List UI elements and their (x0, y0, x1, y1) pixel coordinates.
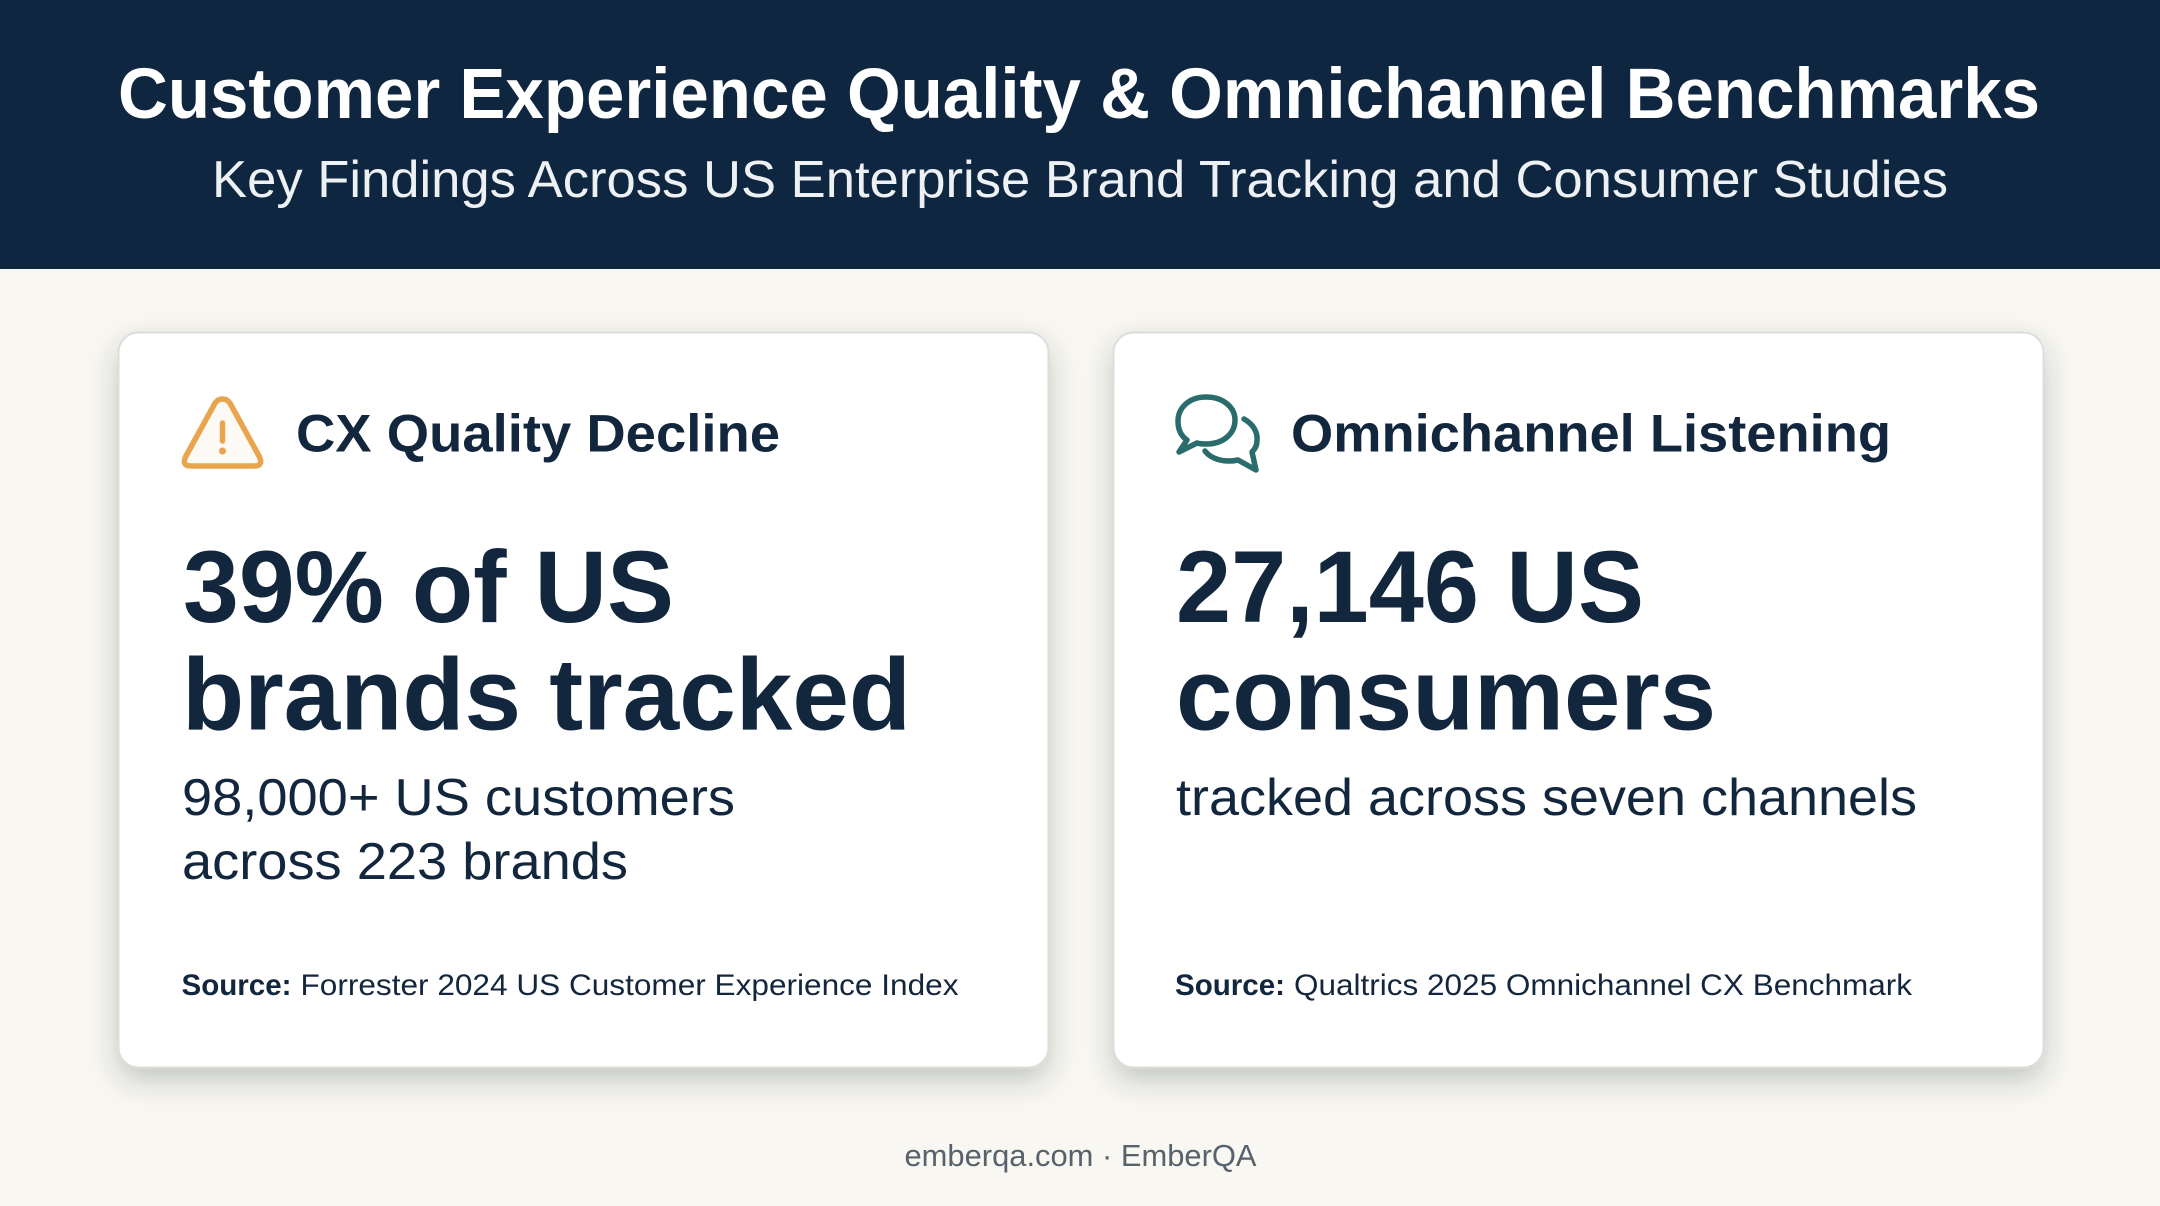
icon: chat bubbles (1178, 397, 1257, 470)
panel heading: CX Quality Decline (296, 404, 780, 464)
headline stat: 39% of US (183, 530, 674, 644)
headline stat: consumers (1176, 638, 1716, 752)
headline stat: 27,146 US (1176, 530, 1644, 644)
header banner (0, 0, 2160, 269)
subtitle: Key Findings Across US Enterprise Brand Tracking and Consumer Studies (212, 151, 1948, 209)
headline stat: brands tracked (182, 638, 911, 752)
stat detail: across 223 brands (182, 833, 628, 891)
icon: warning triangle (184, 399, 261, 466)
source note: Source: (1175, 969, 1285, 1002)
stat detail: tracked across seven channels (1176, 769, 1917, 827)
source note: Source: (182, 969, 292, 1002)
source note: Forrester 2024 US Customer Experience Index (300, 969, 959, 1002)
title: Customer Experience Quality & Omnichannel Benchmarks (118, 55, 2040, 134)
stat detail: 98,000+ US customers (182, 769, 735, 827)
panel: omnichannel listening (1114, 332, 2044, 1068)
panel: CX quality decline (118, 332, 1048, 1068)
source note: Qualtrics 2025 Omnichannel CX Benchmark (1294, 969, 1913, 1002)
stat detail (182, 769, 735, 891)
headline stat (1176, 530, 1716, 752)
headline stat (182, 530, 911, 752)
panel heading: Omnichannel Listening (1291, 404, 1891, 464)
footer: emberqa.com · EmberQA (904, 1138, 1257, 1173)
